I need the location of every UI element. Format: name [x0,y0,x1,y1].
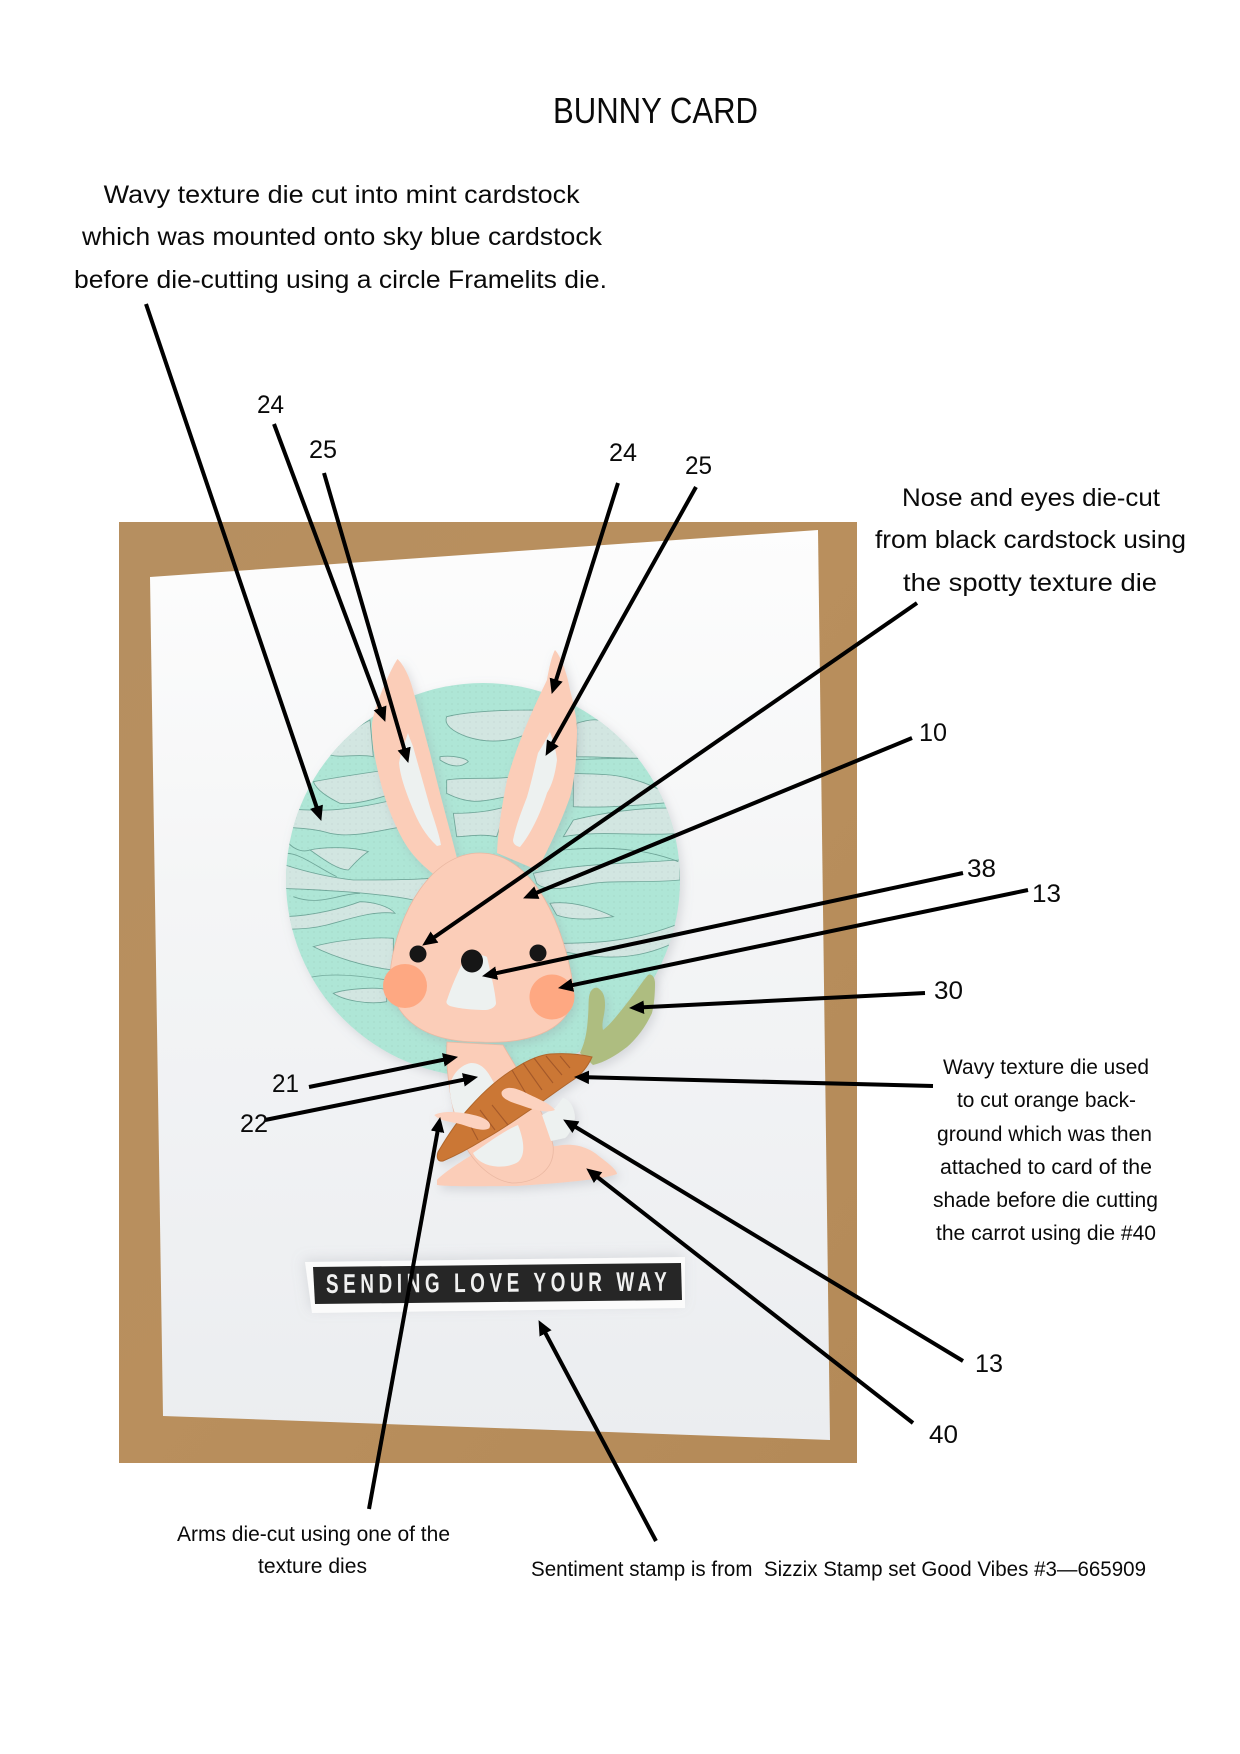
text block: carrot note: the carrot using die #40 [936,1222,1156,1245]
right eye [530,944,546,962]
carrot leaves [580,975,655,1065]
left inner ear [399,733,441,846]
text block: sentiment note: Sentiment stamp is from Sizzix Stamp set Good Vibes #3—665909 [531,1558,1146,1581]
text block: wavy texture note: Wavy texture die cut into mint cardstock [104,181,580,209]
body [447,1042,553,1183]
arrow: snout 38 [496,873,963,973]
title: BUNNY CARD [553,90,758,131]
text block: carrot note: attached to card of the [940,1156,1152,1179]
arrow: carrot leaves 30 [643,993,925,1007]
arrow: foot 40 [597,1177,913,1423]
text block: carrot note: to cut orange back- [957,1089,1136,1112]
text block: carrot note: shade before die cutting [933,1189,1158,1212]
arrow: wavy texture [146,304,317,808]
text block: nose and eyes note: the spotty texture die [903,569,1157,597]
text block: nose and eyes note: Nose and eyes die-cut [902,484,1160,512]
foot [437,1145,617,1186]
arrow: sentiment [545,1332,656,1541]
arrow: left ear 25 [324,473,404,750]
arrow: paw 13 [575,1127,963,1361]
number labels: 22 [240,1110,268,1138]
arrow: neck 21 [309,1060,444,1087]
text block: wavy texture note: which was mounted onto sky blue cardstock [81,223,603,251]
snout [446,955,496,1010]
number labels: 40 [929,1421,958,1449]
number labels [240,391,1061,1449]
number labels: 25 [685,452,712,480]
arrow: arms [369,1131,438,1509]
text block: nose and eyes note [875,484,1186,597]
arrow: cheek 13 [572,890,1028,985]
text block: carrot note [933,1056,1158,1245]
arrow: nose and eyes [434,603,917,938]
right inner ear [513,732,557,847]
number labels: 13 [1032,880,1061,908]
circle with wavy texture [280,683,680,1077]
arrow: left ear 24 [274,424,380,709]
bunny card annotated figure [76,98,1184,1580]
lower white tummy [473,1125,523,1167]
number labels: 24 [609,439,637,467]
text block: carrot note: Wavy texture die used [943,1056,1149,1079]
number labels: 25 [309,436,337,464]
illustration: bunny [372,650,655,1186]
number labels: 21 [272,1070,299,1098]
left ear [372,659,458,877]
left arm [434,1112,490,1130]
right arm [502,1088,555,1111]
text block: wavy texture note [74,181,607,294]
left eye [410,946,426,962]
number labels: 30 [934,977,963,1005]
upper white tummy [450,1063,500,1125]
arrow: head 10 [536,738,912,893]
number labels: 10 [919,719,947,747]
text block: arms note: texture dies [258,1555,367,1578]
photo: kraft background [119,522,857,1463]
arrow: carrot note [588,1077,933,1086]
text block: nose and eyes note: from black cardstock using [875,526,1186,554]
right white paw [542,1098,575,1141]
number labels: 13 [975,1350,1003,1378]
nose [461,950,483,972]
number labels: 24 [257,391,284,419]
arrow: right ear 25 [552,487,696,744]
right cheek [530,974,574,1020]
carrot [437,1054,592,1161]
sentiment text: SENDING LOVE YOUR WAY [326,1266,667,1299]
number labels: 38 [967,855,996,883]
arrow: tummy 22 [265,1080,464,1120]
left cheek [383,964,427,1008]
right ear [497,650,577,870]
head [390,853,573,1042]
text block: arms note [177,1523,450,1578]
text block: arms note: Arms die-cut using one of the [177,1523,450,1546]
arrow: right ear 24 [556,483,618,681]
text block: wavy texture note: before die-cutting using a circle Framelits die. [74,266,607,294]
photo: white card [150,530,830,1440]
text block: carrot note: ground which was then [937,1123,1152,1146]
sentiment strip [305,1257,685,1313]
